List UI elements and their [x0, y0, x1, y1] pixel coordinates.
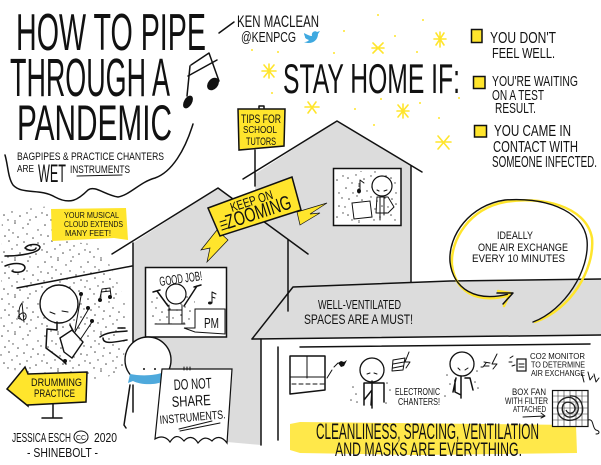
room window — [290, 356, 347, 394]
text: well-ventilated spaces — [304, 297, 413, 327]
subtitle: ARE — [17, 164, 34, 175]
text: well-ventilated spaces: WELL-VENTILATED — [318, 297, 401, 312]
icon: twitter bird — [304, 31, 320, 43]
highlight band — [290, 422, 577, 455]
author credit: @KENPCG — [241, 29, 296, 46]
icon: treble clef and note — [18, 288, 112, 322]
subtitle — [17, 151, 164, 188]
label: co2 monitor: TO DETERMINE — [531, 360, 585, 370]
title: PANDEMIC — [17, 95, 172, 151]
label: box fan — [505, 387, 548, 418]
text: ideally one air exchange — [472, 230, 568, 265]
window: good job tutor: PM — [204, 315, 219, 332]
label: co2 monitor: CO2 MONITOR — [530, 352, 585, 361]
sign: tips for school tutors: SCHOOL — [243, 125, 277, 136]
musical cloud stipple — [0, 206, 125, 380]
title: HOW TO PIPE — [16, 4, 206, 62]
label: electronic chanters: ELECTRONIC — [395, 387, 440, 398]
subtitle: INSTRUMENTS — [70, 164, 130, 176]
artist credit: - SHINEBOLT - — [27, 445, 98, 460]
artist credit: CC — [76, 435, 86, 442]
icon: box fan — [552, 372, 599, 434]
label: box fan: WITH FILTER — [505, 396, 548, 406]
sign: tips for school tutors: TIPS FOR — [241, 112, 281, 126]
checklist: ON A TEST — [492, 87, 544, 104]
checklist: RESULT. — [495, 100, 536, 117]
checklist: YOU CAME IN — [494, 123, 571, 140]
subtitle speech squiggle — [5, 124, 193, 201]
sign: drumming practice: DRUMMING — [31, 377, 82, 389]
icon: co2 monitor — [509, 356, 526, 371]
checklist: FEEL WELL. — [492, 45, 555, 62]
callout: musical cloud: MANY FEET! — [65, 229, 111, 238]
sign: drumming practice: PRACTICE — [34, 388, 75, 400]
banner: keep on zooming — [201, 177, 327, 262]
checklist — [472, 30, 597, 171]
icon: music note — [181, 53, 221, 110]
callout: musical cloud: CLOUD EXTENDS — [64, 220, 123, 229]
artist credit: 2020 — [94, 430, 117, 445]
sign: do not share instruments: DO NOT — [173, 375, 212, 394]
house outlines — [17, 121, 601, 445]
label: co2 monitor: AIR EXCHANGE — [531, 369, 585, 378]
sign: do not share instruments: INSTRUMENTS. — [159, 407, 226, 427]
piper figure — [40, 285, 94, 364]
sign: tips for school tutors: TUTORS — [246, 136, 276, 148]
sign: tips for school tutors — [238, 106, 285, 186]
figure: electronic chanter player 2 — [444, 352, 497, 398]
heading: stay home if: STAY HOME IF: — [283, 55, 460, 102]
subtitle: WET — [38, 160, 66, 188]
label: box fan: BOX FAN — [512, 387, 546, 397]
author credit — [219, 12, 319, 46]
window: good job tutor: GOOD JOB! — [158, 268, 203, 289]
checklist: YOU DON'T — [490, 30, 556, 47]
window: upper tutor — [334, 168, 401, 226]
callout: musical cloud: YOUR MUSICAL — [64, 211, 119, 220]
subtitle: BAGPIPES & PRACTICE CHANTERS — [17, 151, 164, 163]
text: well-ventilated spaces: SPACES ARE A MUST! — [304, 311, 413, 327]
sign: drumming practice — [7, 367, 87, 418]
artist credit: JESSICA ESCH — [12, 430, 71, 445]
banner: keep on zooming: ZOOMING — [223, 192, 294, 234]
masked figure — [124, 337, 171, 428]
label: box fan: ATTACHED — [513, 405, 546, 414]
author credit: KEN MACLEAN — [237, 12, 319, 31]
air exchange spiral arrow — [450, 200, 592, 322]
gray houses — [133, 121, 601, 445]
label: electronic chanters — [395, 387, 440, 408]
label: electronic chanters: CHANTERS! — [398, 397, 440, 408]
title — [10, 4, 206, 151]
decorative stars — [251, 14, 460, 149]
text: ideally one air exchange: IDEALLY — [497, 230, 534, 242]
sound swirls — [5, 244, 127, 342]
sign: do not share instruments — [155, 367, 232, 443]
title: THROUGH A — [10, 48, 170, 108]
text: ideally one air exchange: EVERY 10 MINUTES — [472, 253, 565, 265]
banner: keep on zooming: KEEP ON — [228, 187, 275, 215]
sign: do not share instruments: SHARE — [171, 392, 211, 411]
takeaway text — [316, 419, 539, 461]
window: good job tutor — [146, 268, 226, 337]
label: co2 monitor — [530, 352, 585, 378]
text: ideally one air exchange: ONE AIR EXCHANGE — [478, 242, 568, 254]
figure: electronic chanter player 1 — [350, 352, 410, 408]
callout: musical cloud — [51, 208, 128, 241]
artist credit — [12, 430, 117, 460]
